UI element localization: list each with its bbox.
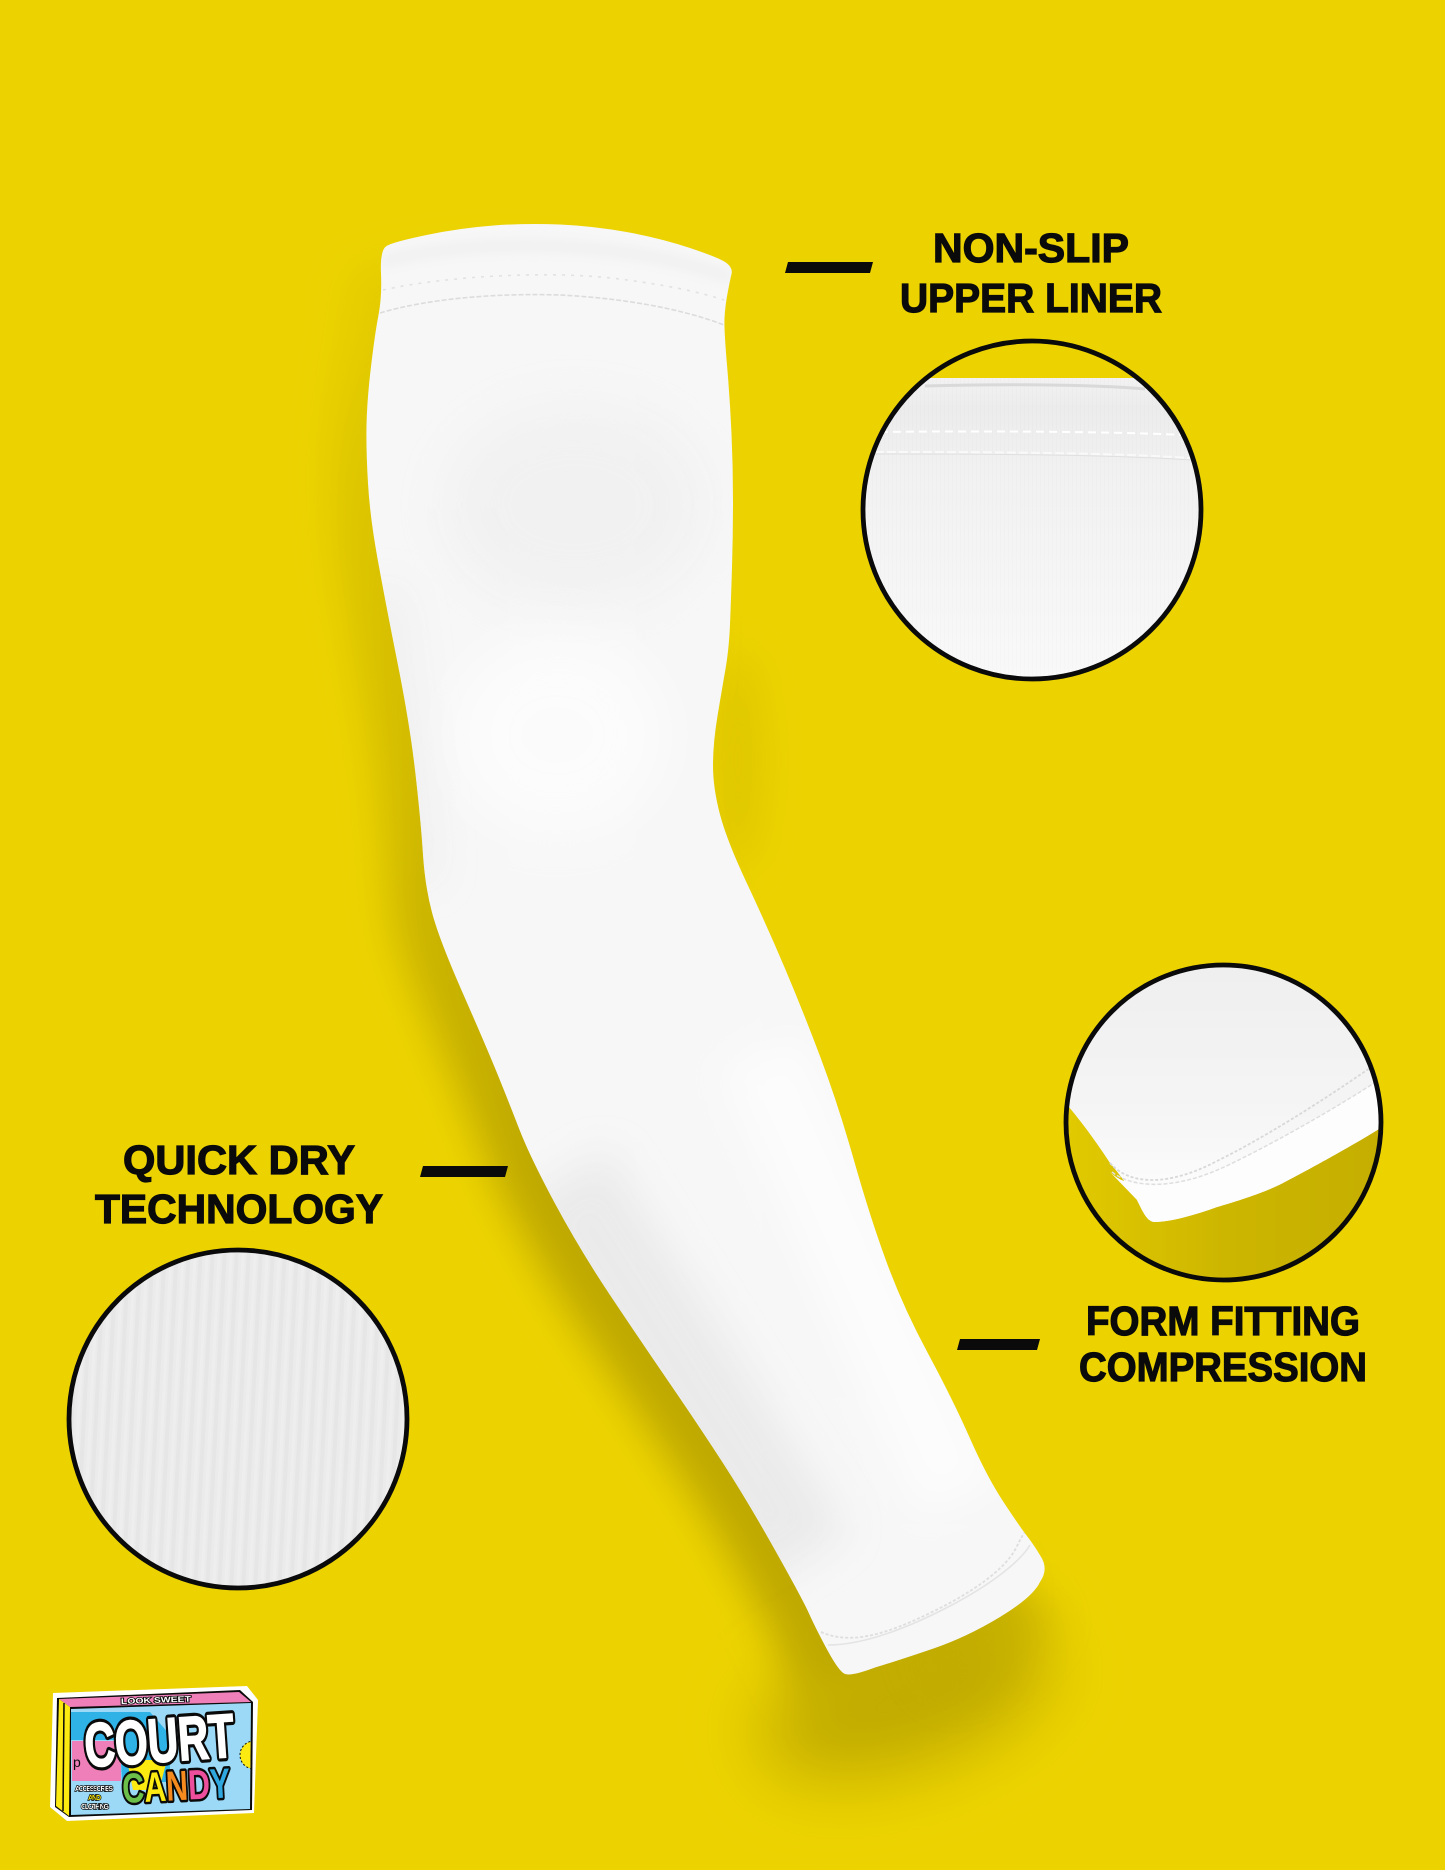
- heading: quick dry technology: [95, 1137, 383, 1232]
- logo: court candy box: CANDY: [121, 1759, 231, 1812]
- heading: form fitting compression: FORM FITTING: [1086, 1298, 1360, 1344]
- heading: non-slip upper liner: NON-SLIP: [933, 225, 1129, 271]
- callout: non-slip upper liner: [785, 225, 1220, 688]
- heading: non-slip upper liner: UPPER LINER: [900, 275, 1162, 321]
- sleeve shadow: [332, 250, 1068, 1809]
- logo: court candy box: ACCESSORIES: [75, 1786, 113, 1793]
- dash: quick dry: [420, 1166, 508, 1177]
- lower cuff stitching: [821, 1532, 1030, 1645]
- heading: non-slip upper liner: [900, 225, 1162, 321]
- dash: form fitting: [957, 1339, 1040, 1350]
- dash: non-slip: [785, 262, 873, 273]
- logo: court candy box: AND: [88, 1795, 101, 1802]
- logo: court candy box: [50, 1686, 268, 1821]
- logo: court candy box: LOOK SWEET: [121, 1695, 191, 1706]
- detail circle: lower cuff: [1060, 950, 1390, 1280]
- heading: form fitting compression: [1079, 1298, 1367, 1390]
- callout: quick dry technology: [69, 1137, 508, 1588]
- logo: court candy box: COURT: [82, 1702, 237, 1781]
- compression arm sleeve: [366, 224, 1045, 1674]
- logo: court candy box: COURT: [82, 1702, 237, 1781]
- logo: court candy box: p: [73, 1754, 81, 1770]
- callout: form fitting compression: [957, 950, 1390, 1390]
- detail circle: upper liner: [850, 341, 1220, 688]
- detail circle: fabric weave: [69, 1250, 407, 1588]
- heading: quick dry technology: TECHNOLOGY: [95, 1186, 383, 1232]
- logo: court candy box: CLOTHING: [81, 1804, 110, 1811]
- upper cuff stitching: [380, 275, 724, 325]
- heading: quick dry technology: QUICK DRY: [123, 1137, 355, 1183]
- heading: form fitting compression: COMPRESSION: [1079, 1344, 1367, 1390]
- infographic canvas: [50, 224, 1384, 1821]
